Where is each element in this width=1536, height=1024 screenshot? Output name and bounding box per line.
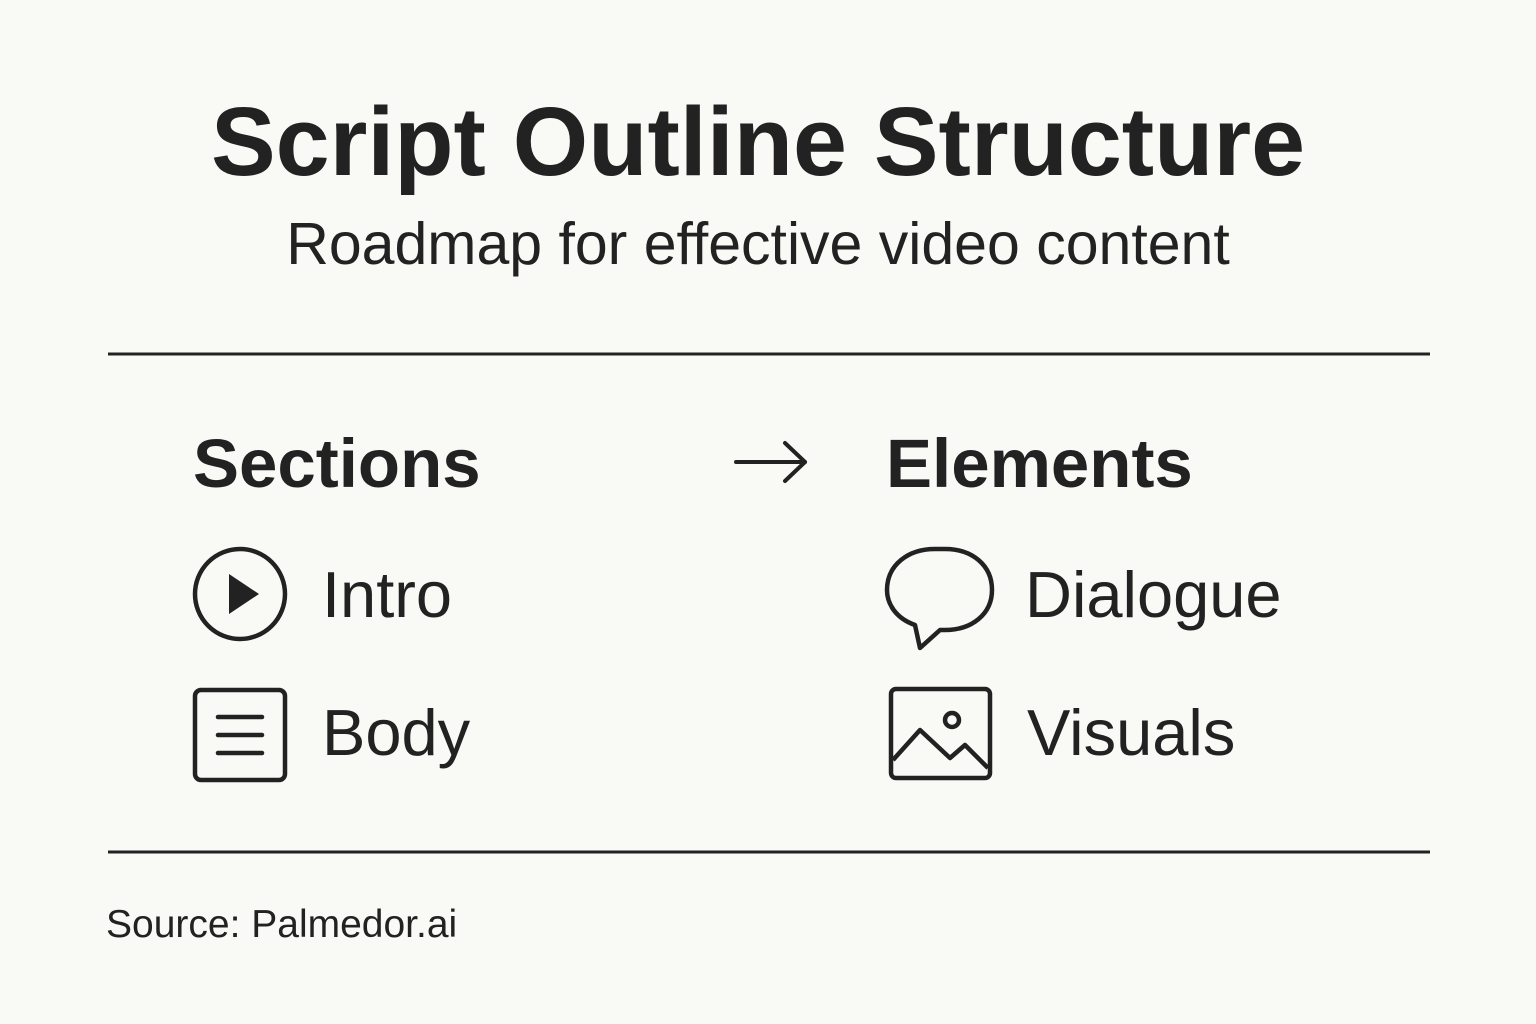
label: dialogue: Dialogue [1025,558,1282,631]
heading: elements: Elements [886,425,1193,502]
item: body [195,690,471,780]
icon: document [195,690,285,780]
icon: speech bubble [887,549,992,648]
label: intro: Intro [322,558,452,631]
title: Script Outline Structure [211,87,1305,196]
subtitle: Roadmap for effective video content [286,211,1230,277]
item: dialogue [887,549,1282,648]
item: intro [195,549,452,639]
icon: play circle [195,549,285,639]
label: body: Body [322,696,471,769]
item: visuals [891,689,1235,778]
label: visuals: Visuals [1027,696,1235,769]
arrow [736,443,805,481]
source: Source: Palmedor.ai [106,903,457,946]
heading: sections: Sections [193,425,481,502]
icon: image [891,689,990,778]
